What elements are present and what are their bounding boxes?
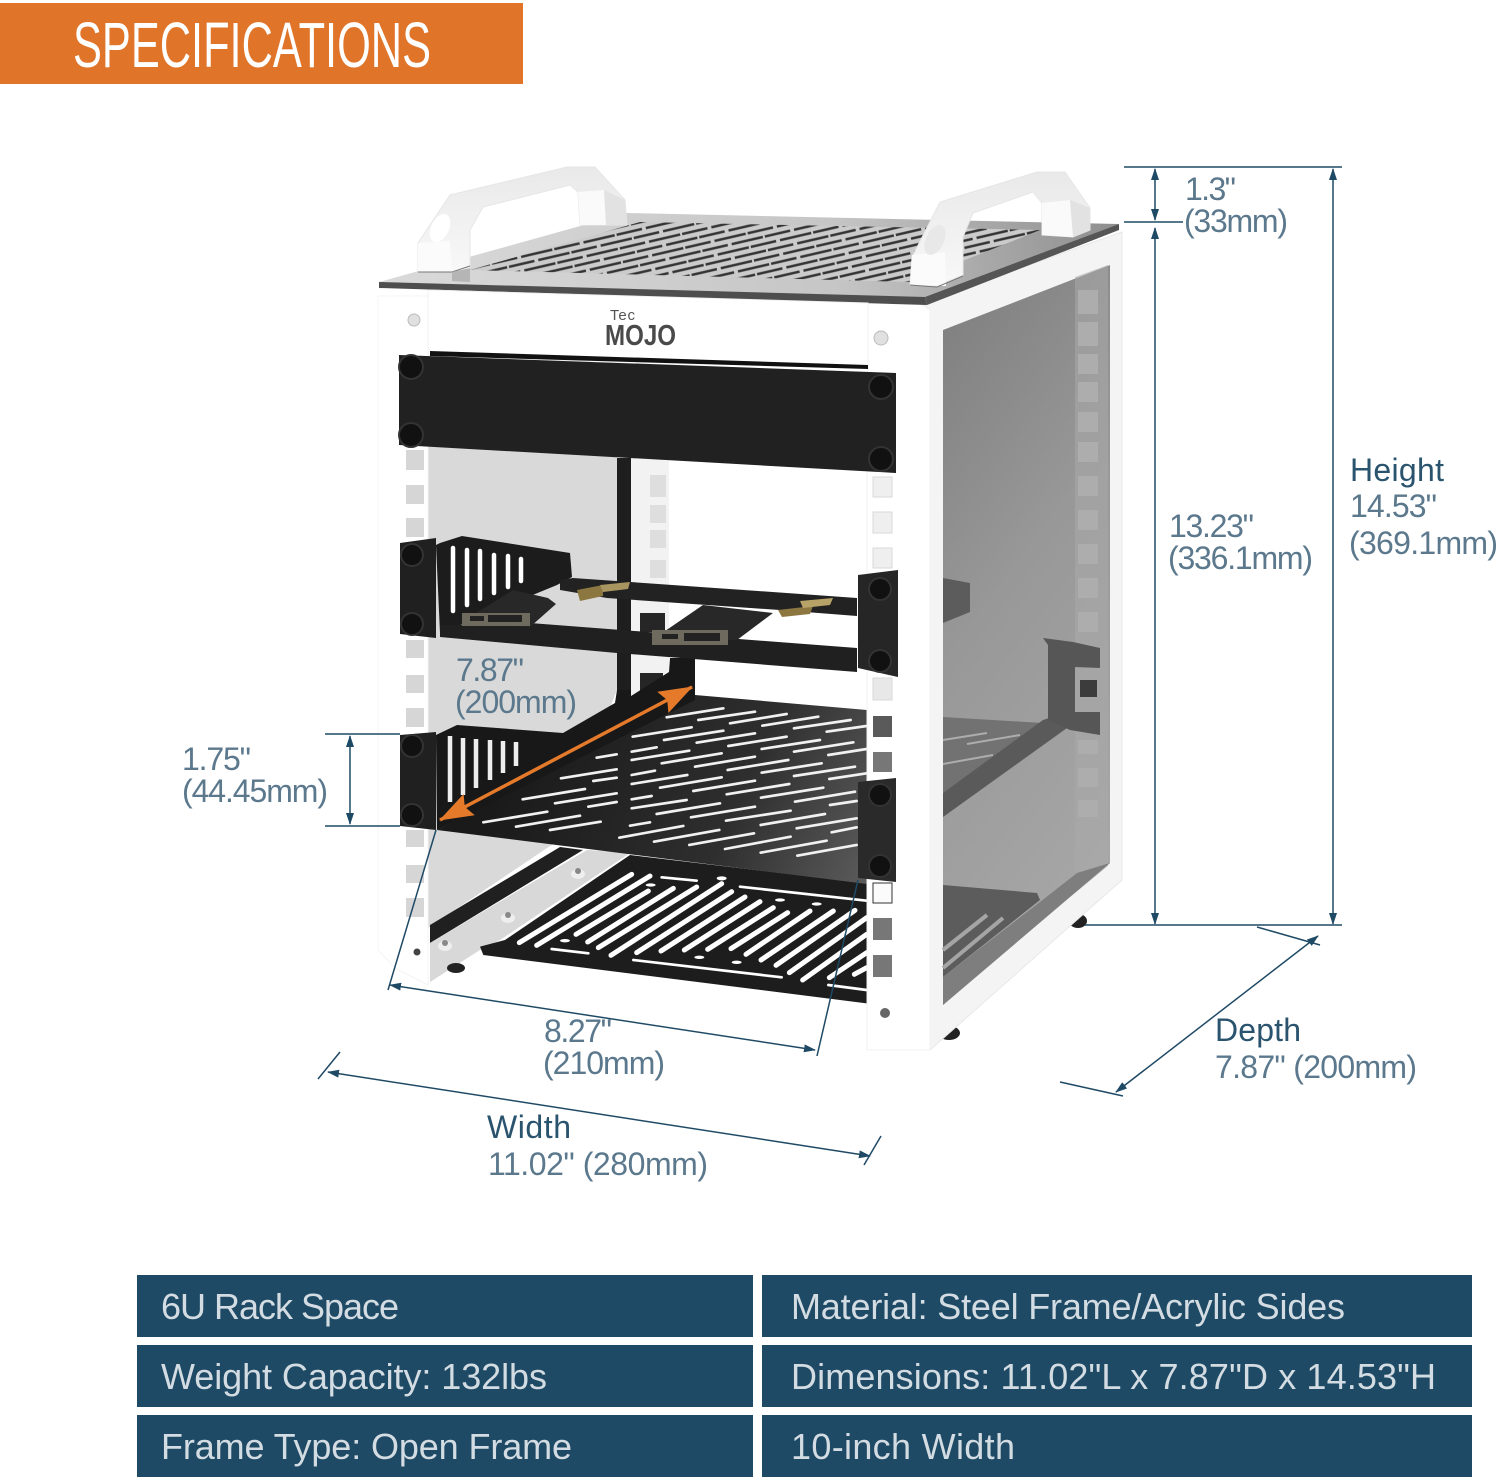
floor rail seen through acrylic [943,863,1110,1005]
dimension: overall height [1085,169,1498,925]
rear connectors seen through acrylic [1043,638,1100,735]
title text: SPECIFICATIONS [73,9,431,81]
dimension: inner width [388,830,858,1081]
product photo: rack cabinet [378,167,1122,1050]
spec: rack space [137,1275,753,1337]
label: depth value: 7.87" (200mm) [1215,1049,1417,1085]
header strip with logo [428,290,868,373]
left acrylic panel seen through the frame [428,440,617,928]
spec: dimensions: Dimensions: 11.02"L x 7.87"D x 14.53"H [791,1356,1436,1397]
rear post with holes [617,458,669,698]
label: 14.53 in: 14.53" [1350,488,1437,524]
label: width value: 11.02" (280mm) [488,1146,708,1182]
middle bracket with hdmi boards [436,536,857,672]
top plate front edge [379,282,927,305]
panel screws [399,355,893,471]
spec: frame type: Frame Type: Open Frame [161,1426,572,1467]
bottom vented shelf [480,855,867,1003]
arrow: shelf depth [440,687,692,820]
spec: material: Material: Steel Frame/Acrylic Sides [791,1286,1345,1327]
smoked acrylic side panel [943,265,1110,1005]
label: 1.3 in: 1.3" [1185,171,1236,207]
rack ears and screws [400,538,898,882]
dimension: width [318,1052,881,1182]
brace bar seen through acrylic [943,710,1073,817]
label: Height heading: Height [1350,452,1444,488]
foot: left [447,963,465,973]
label: 44.45 mm: (44.45mm) [182,773,328,809]
logo text: Tec: Tec [610,307,636,324]
bracket seen through acrylic [943,578,970,623]
label: 369.1 mm: (369.1mm) [1349,525,1498,561]
foot: right rear [1069,914,1087,928]
dimension: inner height [1155,228,1313,924]
top plate side edge [925,224,1119,305]
label: Width heading: Width [487,1109,571,1145]
label: 8.27 in: 8.27" [544,1013,612,1049]
rack holes seen through acrylic [1075,265,1108,893]
top screws [408,314,888,345]
label: shelf depth value [455,652,577,720]
label: 210 mm: (210mm) [543,1045,665,1081]
dimension: handle height [1124,167,1342,239]
spec: frame type [137,1415,753,1477]
top plate slots [470,222,1040,282]
dimension: rack unit height [182,734,400,826]
label: 1.75 in: 1.75" [182,741,251,777]
label: 33 mm: (33mm) [1184,203,1288,239]
floor shelf seen through acrylic [943,885,1040,977]
hdmi ports [462,613,530,626]
spec: rack space: 6U Rack Space [161,1286,399,1327]
label: shelf depth value: 7.87" [456,652,524,688]
spec: weight capacity [137,1345,753,1407]
handle: right [910,172,1090,287]
spec: width: 10-inch Width [791,1426,1015,1467]
side panel frame [920,232,1122,1050]
label: 13.23 in: 13.23" [1169,508,1254,544]
spec table [137,1275,1472,1477]
dimension: depth [1060,927,1417,1096]
label: 336.1 mm: (336.1mm) [1168,540,1313,576]
handle: left [418,167,627,282]
label: shelf depth value: (200mm) [455,684,577,720]
spec: material [762,1275,1472,1337]
right front post [867,300,930,1050]
lower shelf with side wall [436,658,867,884]
top plate surface [379,213,1119,298]
logo text: MOJO: MOJO [605,320,676,352]
shelf side wall [436,658,695,830]
gold connectors [577,585,603,601]
shelf seen through acrylic [943,717,1043,793]
shelf slots [483,708,867,856]
spec: dimensions [762,1345,1472,1407]
floor rail and silver floor plate [430,847,630,982]
title banner [0,3,523,84]
spec: width [762,1415,1472,1477]
label: Depth heading: Depth [1215,1012,1301,1048]
foot: right front [938,1026,960,1040]
spec: weight capacity: Weight Capacity: 132lbs [161,1356,547,1397]
left front post [378,296,428,985]
blanking panel 2U [399,351,896,473]
